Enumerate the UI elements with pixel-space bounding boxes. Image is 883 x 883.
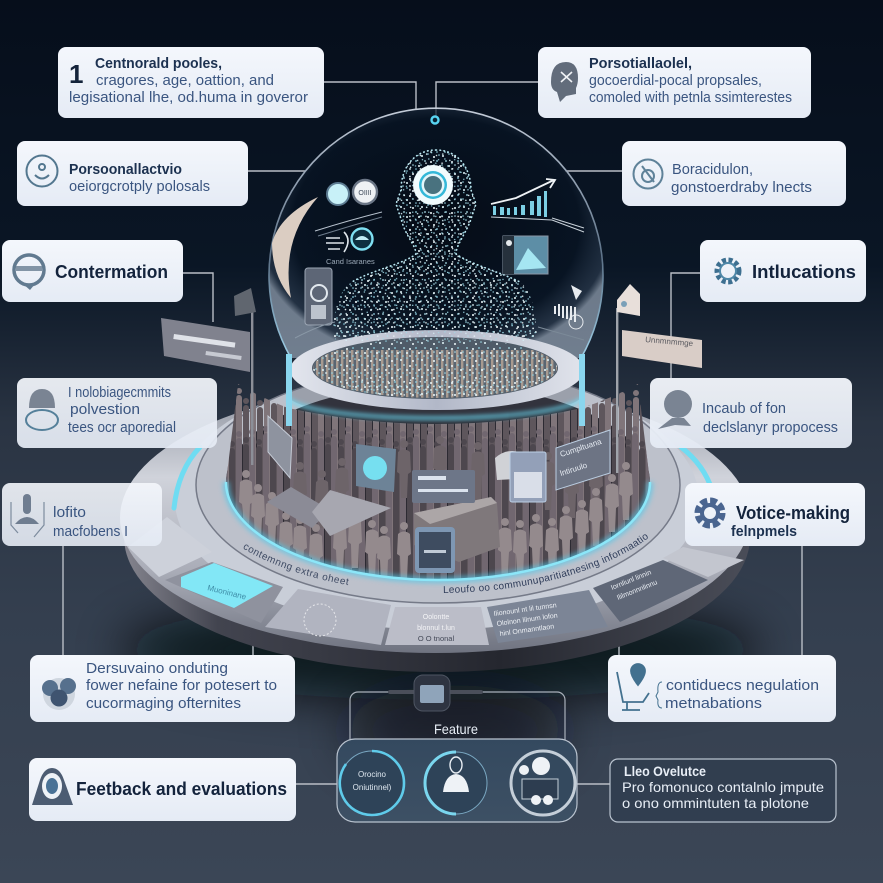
target ring on head [413,165,453,205]
banner [622,330,702,368]
object: tilted card: lntiruulo [559,461,589,478]
platform [120,386,750,672]
tile labels [207,569,659,643]
icon: person bust [26,389,58,430]
banner [161,318,250,372]
card: right 3 [700,240,866,302]
ring text [193,480,683,593]
card: left 4: I nolobiagecmmits [68,384,171,401]
circle: text gauge: Orocino [358,770,387,779]
node [414,675,450,711]
card: right 2: Boracidulon, [672,161,753,178]
card: left 4 [17,378,217,448]
tile labels: Ololnon lilnum lofon [496,612,558,628]
object: white blob [495,451,535,480]
highlighted tile [181,563,273,608]
card: left 2: Porsoonallactvio [69,161,182,178]
right flags [616,284,702,473]
circle: text gauge: Oniutinnel) [353,783,392,792]
card: left 4: tees ocr aporedial [68,419,176,436]
tile labels: blonnul t.lun [417,625,455,632]
object: tilted card: Cumpltuana [559,437,603,459]
small white chart [554,285,583,329]
card: right 1: Porsotiallaolel, [589,55,692,72]
icon: person silhouette [658,390,692,429]
card: right 2 [622,141,846,206]
tile labels: Oolontte [423,614,449,621]
card: right 4 [650,378,852,448]
card: left 6: Dersuvaino onduting [86,660,228,677]
card: left 1 [58,47,324,118]
card: right 5: Votice-making [736,503,850,523]
tile labels: hinl Onmanntlaon [499,623,555,638]
card: left 1: Centnorald pooles, [95,55,222,72]
tile row [128,517,744,645]
card: right 1: comoled with petnla ssimterestes [589,89,792,106]
icon: gear [717,260,739,282]
card: right 6: metnabations [665,695,762,712]
pit glow ring [226,482,650,580]
card: left 1: cragores, age, oattion, and [96,72,274,89]
step number: 1 [69,59,83,89]
card: outlined notes [610,759,836,822]
glass sphere [269,108,603,358]
card: left 3 [2,240,183,302]
glow pillars [286,354,292,426]
object: tablet [415,527,455,573]
object: tilted card [556,430,610,490]
card: left 5 [2,483,162,546]
card: left 6 [30,655,295,722]
circle: dashboard [511,751,575,815]
tile labels: O O tnonal [418,634,454,643]
sphere card [305,268,332,325]
card: right 3: Intlucations [752,262,856,282]
left sphere widgets: Cand Isaranes [326,257,375,266]
card: right 2: gonstoerdraby lnects [671,179,812,196]
card: right 4: declslanyr propocess [703,419,838,436]
label: feature: Feature [434,721,478,737]
platform base [124,402,750,672]
connector frame with node [350,675,565,752]
icon: speech bubble [14,255,44,290]
image tile [503,236,548,274]
right sphere widgets [491,179,584,340]
card: right 5: felnpmels [731,523,797,540]
crowd pit [226,380,650,586]
card: left 3: Contermation [55,262,168,282]
object: box [414,497,500,562]
tile labels: Muoninane [207,583,248,602]
left flags [161,288,256,465]
card: outlined notes: Lleo Ovelutce [624,763,706,779]
icon: circled symbol [634,160,662,188]
banner: Unnmnmmge [645,335,694,348]
tile labels: Ililmonnnlinnu [616,579,659,602]
circle: text gauge [340,751,404,815]
icon: user with brackets [11,494,44,537]
platform: contemnng extra oheet [244,544,349,586]
card: left 6: fower nefaine for potesert to [86,677,277,694]
card: left 2: oeiorgcrotply polosals [69,178,210,195]
card: right 1 [538,47,811,118]
platform top surface [120,383,750,653]
crowd rows [226,380,650,580]
card: feedback and evaluations [29,758,296,821]
tile labels: Ilionounl nt lil tunnsn [493,602,557,618]
card: outlined notes: o ono ommintuten ta plotone [622,795,809,811]
card: left 6: cucormaging ofternites [86,695,241,712]
left sphere widgets: OIIII [358,190,372,197]
card: right 6: contiduecs negulation [666,677,819,694]
card: right 1: gocoerdial-pocal propsales, [589,72,762,89]
object: cyan screen [356,444,396,492]
outer blue arcs [174,447,712,508]
icon: overlapping circles [42,678,76,710]
object: info card [412,470,475,503]
icon: location pin and chair [617,664,662,710]
card: right 6 [608,655,836,722]
card: right 4: Incaub of fon [702,400,786,417]
foreground figures [239,436,633,584]
platform: Leoufo oo communuparitiatnesing informaatio [444,534,648,593]
trend chart [491,179,584,232]
card: feedback and evaluations: Feetback and evaluations [76,779,287,799]
holographic ring [286,325,585,426]
tile labels: Iornliunl linnin [610,569,653,592]
object: data card [510,452,546,502]
card: left 1: legisational lhe, od.huma in goveror [69,89,308,106]
card: left 2 [17,141,248,206]
icon: head profile [551,62,578,102]
left sphere widgets [295,180,382,338]
icon: shield pin [32,768,73,805]
circle: person [425,752,487,814]
object: open book [267,487,391,536]
card: left 5: lofito [53,504,86,521]
dotted person hologram [333,150,537,337]
panel: three circles [337,739,577,822]
card: left 4: polvestion [70,401,140,418]
card: outlined notes: Pro fomonuco contalnlo jmpute [622,779,824,795]
icon: location circle [26,156,58,186]
top node [432,116,438,124]
reflection [272,197,318,298]
object: left tilted card [268,416,292,478]
card: left 5: macfobens I [53,523,128,540]
connector lines [63,82,802,784]
icon: large gear [699,502,721,524]
card: right 5 [685,483,865,546]
